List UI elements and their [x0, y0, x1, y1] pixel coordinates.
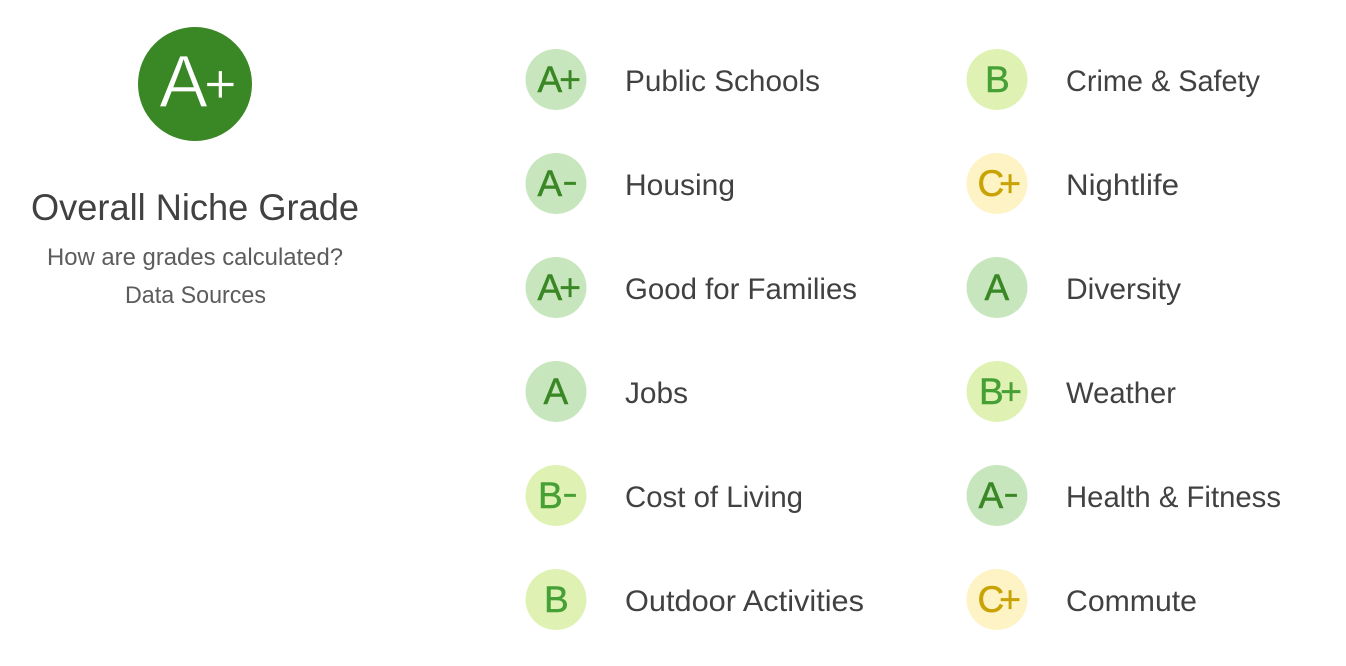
row: jobs A: Jobs — [625, 377, 688, 410]
row: crime and safety B: Crime & Safety — [1066, 65, 1260, 98]
row: crime and safety B: B — [985, 59, 1010, 100]
icon: overall grade badge A+: A — [159, 40, 209, 123]
row: crime and safety B — [966, 49, 1260, 110]
row: public schools A+: Public Schools — [625, 65, 820, 98]
row: public schools A+ — [526, 49, 820, 110]
row: good for families A+: Good for Families — [625, 273, 857, 306]
panel: overall grade — [31, 27, 359, 309]
row: housing A-: A — [538, 163, 562, 204]
row: weather B+: B — [979, 371, 1004, 412]
row: good for families A+: A — [538, 267, 562, 308]
row: cost of living B- — [526, 465, 803, 526]
panel: grades column one — [526, 49, 864, 630]
row: outdoor activities B: Outdoor Activities — [625, 585, 864, 618]
row: cost of living B-: Cost of Living — [625, 481, 803, 514]
row: good for families A+: + — [559, 268, 581, 310]
row: cost of living B-: − — [563, 475, 577, 517]
row: weather B+: + — [1000, 372, 1022, 414]
row: housing A-: Housing — [625, 169, 735, 202]
row: jobs A: A — [544, 371, 568, 412]
icon: overall grade badge A+ — [138, 27, 252, 141]
row: commute C+: + — [999, 580, 1021, 622]
row: good for families A+ — [526, 257, 857, 318]
row: diversity A — [966, 257, 1181, 318]
row: public schools A+: + — [559, 60, 581, 102]
row: commute C+: C — [978, 579, 1004, 620]
row: commute C+: Commute — [1066, 585, 1197, 618]
row: health and fitness A-: A — [978, 475, 1004, 516]
row: outdoor activities B: B — [544, 579, 569, 620]
row: cost of living B-: B — [538, 475, 563, 516]
row: public schools A+: A — [538, 59, 562, 100]
row: health and fitness A-: − — [1004, 475, 1018, 517]
row: nightlife C+: Nightlife — [1066, 169, 1179, 202]
row: outdoor activities B — [526, 569, 864, 630]
row: jobs A — [526, 361, 688, 422]
row: health and fitness A-: Health & Fitness — [1066, 481, 1281, 514]
row: housing A- — [526, 153, 735, 214]
row: diversity A: A — [984, 267, 1010, 308]
link: data sources: Data Sources — [125, 282, 266, 309]
row: health and fitness A- — [966, 465, 1281, 526]
row: housing A-: − — [563, 163, 577, 205]
row: weather B+: Weather — [1066, 377, 1176, 410]
row: nightlife C+ — [966, 153, 1179, 214]
row: nightlife C+: + — [999, 164, 1021, 206]
icon: overall grade badge A+: + — [204, 52, 237, 115]
row: nightlife C+: C — [978, 163, 1004, 204]
heading: overall niche grade: Overall Niche Grade — [31, 187, 359, 228]
row: weather B+ — [966, 361, 1176, 422]
row: commute C+ — [966, 569, 1197, 630]
link: how are grades calculated: How are grades calculated? — [47, 244, 343, 271]
panel: grades column two — [966, 49, 1281, 630]
row: diversity A: Diversity — [1066, 273, 1181, 306]
